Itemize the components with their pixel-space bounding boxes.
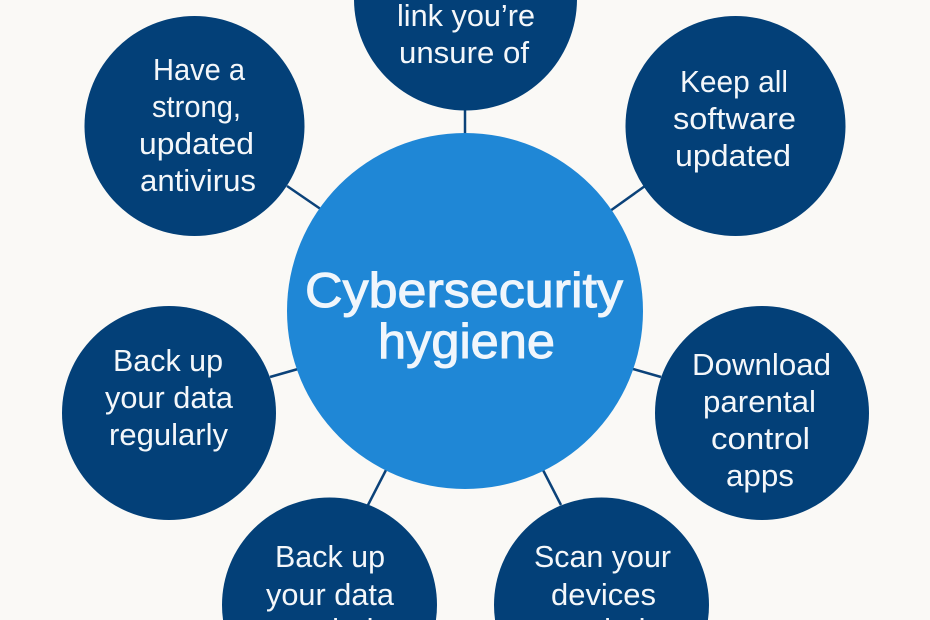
node: back up data (left): your data <box>105 380 234 415</box>
node: antivirus: updated <box>139 126 254 161</box>
node: back up data (bottom) <box>222 498 437 620</box>
central circle: Cybersecurity hygiene <box>287 133 643 489</box>
node: parental control apps: parental <box>703 384 816 419</box>
node: antivirus: strong, <box>152 89 241 124</box>
node: back up data (bottom): Back up <box>275 539 385 574</box>
node: software updates: updated <box>675 138 791 173</box>
node: back up data (bottom): your data <box>266 577 395 612</box>
node: parental control apps <box>655 306 869 520</box>
node: antivirus: antivirus <box>140 163 256 198</box>
node: back up data (left): regularly <box>109 417 228 452</box>
node: back up data (left) <box>62 306 276 520</box>
central circle: Cybersecurity hygiene: Cybersecurity <box>305 264 624 318</box>
node: parental control apps: control <box>711 421 810 456</box>
node: unsure link <box>354 0 577 110</box>
node: parental control apps: apps <box>726 458 794 493</box>
node: software updates <box>626 16 846 236</box>
central circle: Cybersecurity hygiene: hygiene <box>378 315 555 369</box>
node: back up data (left): Back up <box>113 343 223 378</box>
node: antivirus: Have a <box>153 52 246 87</box>
connector lines <box>270 108 661 505</box>
node: scan devices: devices <box>551 577 656 612</box>
node: parental control apps: Download <box>692 347 831 382</box>
node: software updates: Keep all <box>680 64 788 99</box>
node: software updates: software <box>673 101 796 136</box>
node: scan devices: Scan your <box>534 539 671 574</box>
node: antivirus <box>84 16 304 236</box>
node: unsure link: unsure of <box>399 35 529 70</box>
node: scan devices <box>494 498 709 620</box>
